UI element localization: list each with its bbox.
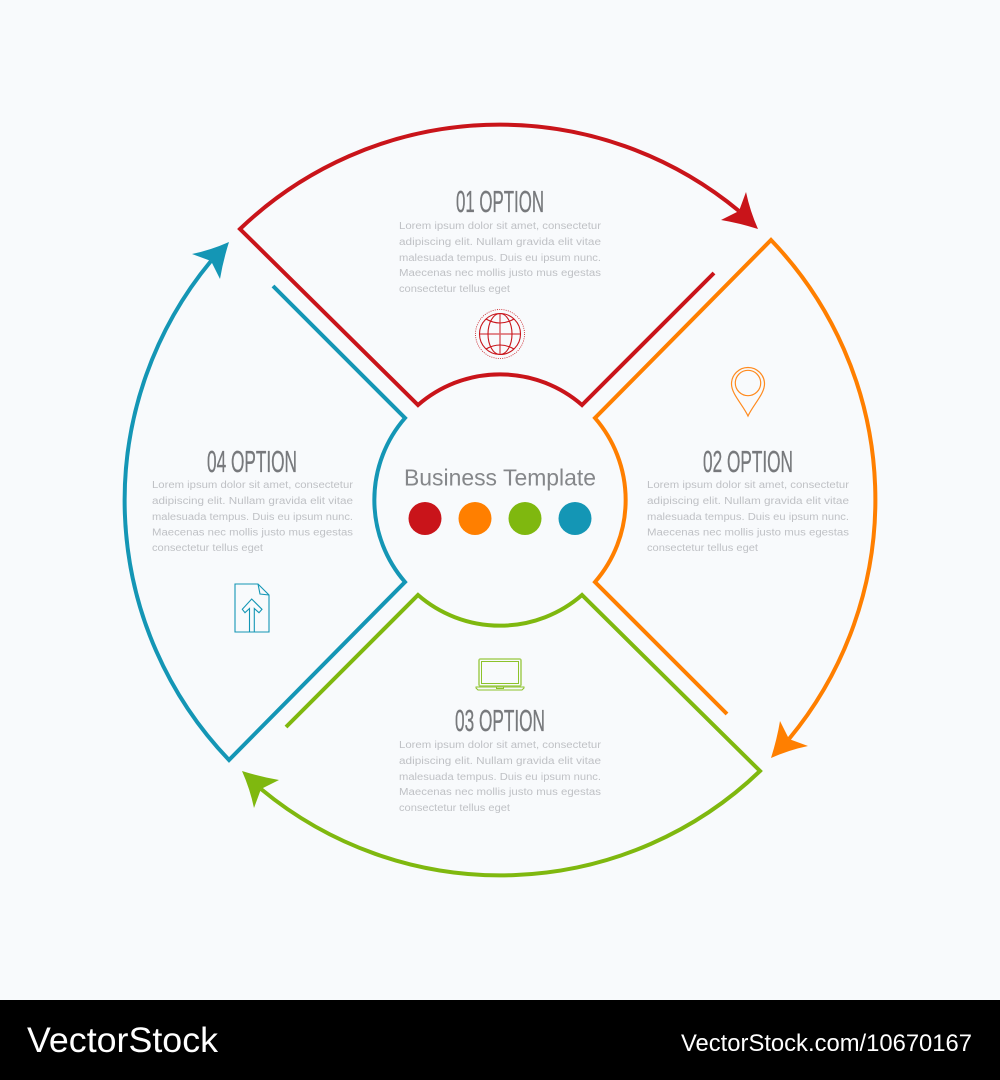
red arrowhead xyxy=(721,192,758,229)
text block: 04 option: malesuada tempus. Duis eu ipsum nunc. xyxy=(152,512,353,523)
heading: 01 option: 01 OPTION xyxy=(456,184,544,219)
text block: 02 option: Maecenas nec mollis justo mus egestas xyxy=(647,528,849,538)
orange segment outline xyxy=(595,240,875,739)
blue arrowhead xyxy=(192,242,229,279)
text block: 03 option: adipiscing elit. Nullam gravida elit vitae xyxy=(399,756,602,767)
icon: document upload xyxy=(235,584,269,632)
text block: 04 option: consectetur tellus eget xyxy=(152,543,263,554)
footer bar xyxy=(0,1000,1000,1080)
text block: 04 option: adipiscing elit. Nullam gravida elit vitae xyxy=(152,496,354,507)
blue segment outline xyxy=(125,261,405,760)
heading: 03 option: 03 OPTION xyxy=(455,703,545,738)
orange arrowhead xyxy=(771,721,808,758)
text block: 02 option: malesuada tempus. Duis eu ipsum nunc. xyxy=(647,512,849,523)
text block: 01 option: Lorem ipsum dolor sit amet, consectetur xyxy=(399,221,602,232)
text block: 01 option: consectetur tellus eget xyxy=(399,284,510,295)
text block: 03 option: malesuada tempus. Duis eu ipsum nunc. xyxy=(399,772,601,783)
text block: 04 option: Maecenas nec mollis justo mus egestas xyxy=(152,528,353,538)
text block: 02 option: Lorem ipsum dolor sit amet, consectetur xyxy=(647,480,850,491)
text block: 03 option xyxy=(399,740,602,814)
panel: 03 option xyxy=(242,595,760,875)
text block: 01 option: adipiscing elit. Nullam gravida elit vitae xyxy=(399,237,602,248)
panel: 02 option xyxy=(595,240,875,758)
text block: 02 option: consectetur tellus eget xyxy=(647,543,758,554)
text block: 04 option xyxy=(152,480,354,554)
text block: 01 option: Maecenas nec mollis justo mus egestas xyxy=(399,268,601,279)
text block: 01 option xyxy=(399,221,602,295)
text block: 02 option xyxy=(647,480,850,554)
text block: 03 option: Lorem ipsum dolor sit amet, consectetur xyxy=(399,740,602,751)
footer url: VectorStock.com/10670167 xyxy=(681,1030,972,1057)
text block: 04 option: Lorem ipsum dolor sit amet, consectetur xyxy=(152,480,354,491)
heading: 02 option: 02 OPTION xyxy=(703,444,793,479)
green arrowhead xyxy=(242,771,279,808)
icon: laptop xyxy=(476,659,524,690)
text block: 03 option: Maecenas nec mollis justo mus egestas xyxy=(399,787,601,798)
center title: Business Template xyxy=(404,464,596,490)
icon: globe xyxy=(476,310,524,358)
colored dots xyxy=(408,502,592,535)
green segment outline xyxy=(261,595,760,875)
text block: 03 option: consectetur tellus eget xyxy=(399,803,510,814)
footer logo: VectorStock xyxy=(27,1021,219,1060)
red segment outline xyxy=(240,125,739,405)
icon: map pin xyxy=(732,368,764,416)
text block: 02 option: adipiscing elit. Nullam gravida elit vitae xyxy=(647,496,850,507)
heading: 04 option: 04 OPTION xyxy=(207,444,297,479)
panel: 04 option xyxy=(125,242,405,760)
text block: 01 option: malesuada tempus. Duis eu ipsum nunc. xyxy=(399,253,601,264)
panel: 01 option xyxy=(240,125,758,405)
